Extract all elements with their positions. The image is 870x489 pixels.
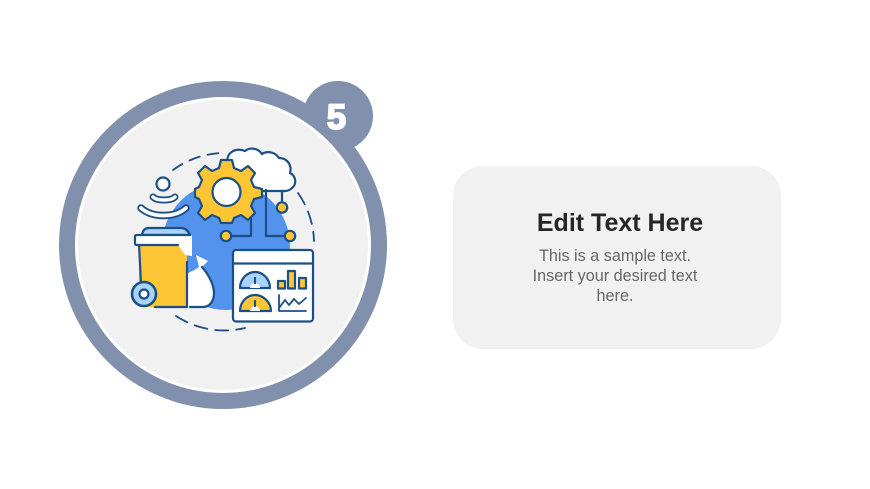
- panel body text: [533, 247, 698, 305]
- outer ring with number badge: [59, 81, 387, 409]
- numbered circle illustration: [59, 81, 387, 409]
- line chart: [279, 295, 306, 311]
- bar chart: [278, 271, 306, 288]
- gauge: bottom: [240, 295, 271, 311]
- text panel: [453, 166, 781, 349]
- gauge: top: [240, 272, 270, 288]
- panel heading: Edit Text Here: [537, 209, 703, 237]
- panel body text: here.: [597, 287, 633, 305]
- panel body text: This is a sample text.: [539, 247, 691, 265]
- circuit lines and nodes: [221, 190, 295, 241]
- badge number: 5: [327, 98, 346, 137]
- icon: wifi signal: [141, 178, 186, 216]
- icon: gear: [195, 160, 262, 223]
- dashboard panel: [233, 250, 313, 322]
- blue backdrop circle: [162, 182, 290, 310]
- icon: smart waste management: [132, 149, 314, 330]
- panel body text: Insert your desired text: [533, 267, 697, 285]
- icon: waste bin: [132, 228, 192, 307]
- dashed orbit: [173, 153, 314, 330]
- icon: cloud: [225, 149, 295, 191]
- icon: garbage bag: [186, 255, 214, 307]
